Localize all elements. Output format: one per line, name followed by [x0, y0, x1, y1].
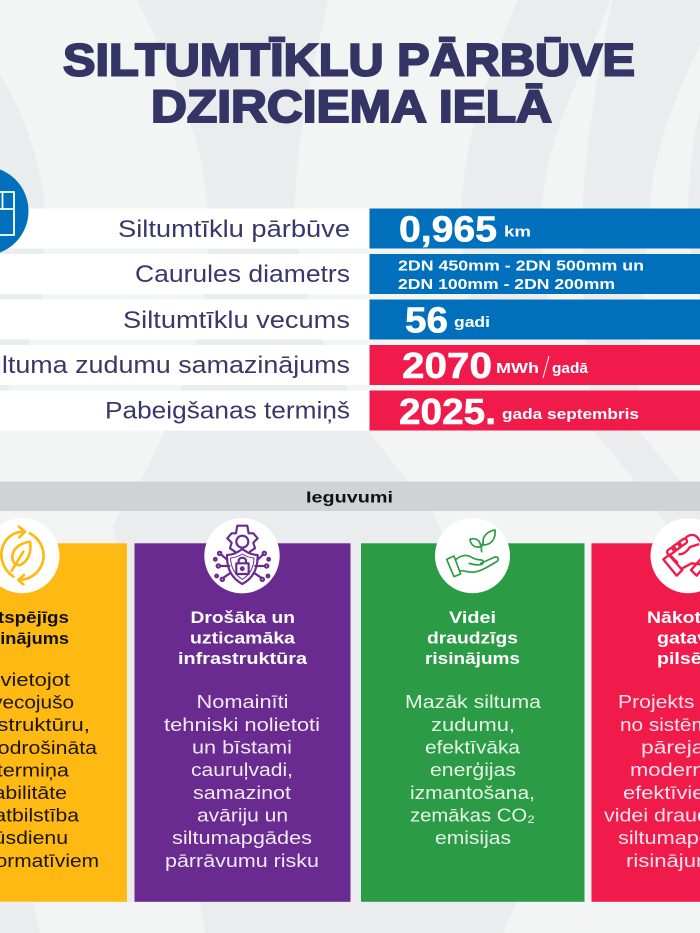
- card text: [0, 669, 99, 871]
- value: heat loss reduction: gadā: [552, 360, 589, 377]
- label: network age: Siltumtīklu vecums: [123, 307, 350, 334]
- card title: infrastruktūra: [178, 650, 308, 668]
- card text: tehniski nolietoti: [164, 714, 320, 735]
- card title: Drošāka un: [190, 609, 295, 627]
- card text: [164, 691, 320, 871]
- card text: zemākas CO₂: [410, 804, 535, 826]
- value: heat loss reduction: 2070: [402, 345, 492, 386]
- card title: risinājums: [425, 650, 520, 668]
- icon: recycling leaf: [0, 518, 60, 593]
- value: length: 0,965: [399, 208, 497, 250]
- value: age: [405, 300, 490, 340]
- card title: [0, 609, 69, 648]
- title: SILTUMTĪKLU PĀRBŪVE: [63, 34, 635, 86]
- value: heat loss reduction: [402, 345, 589, 386]
- card title: [425, 609, 520, 668]
- title: [63, 34, 635, 132]
- value: diameters: 2DN 100mm - 2DN 200mm: [398, 276, 615, 293]
- card text: enerģijas: [430, 759, 516, 780]
- card text: efektīvāka: [425, 736, 521, 758]
- panel: project facts: [0, 208, 700, 432]
- card title: uzticamāka: [190, 630, 296, 648]
- label: completion date: Pabeigšanas termiņš: [105, 398, 350, 424]
- card text: Nomainīti: [196, 691, 288, 712]
- card text: [405, 691, 542, 848]
- icon: network badge: [0, 166, 28, 256]
- card text: zudumu,: [431, 714, 515, 735]
- card title: [647, 609, 700, 668]
- card title: Videi: [449, 609, 496, 627]
- value: heat loss reduction: MWh: [496, 360, 539, 377]
- value: length: km: [504, 224, 531, 240]
- card text: cauruļvadi,: [191, 759, 293, 780]
- title: DZIRCIEMA IELĀ: [151, 81, 552, 132]
- panel: sustainable solution: [0, 518, 127, 902]
- panel: safer infrastructure: [134, 518, 350, 902]
- value: length: [399, 208, 531, 250]
- card text: emisijas: [435, 827, 511, 848]
- value: completion date: gada septembris: [502, 406, 639, 423]
- card title: [178, 609, 308, 668]
- icon: hand with sprout: [435, 518, 510, 593]
- panel: future-ready city: [592, 518, 700, 902]
- card text: avāriju un: [197, 804, 288, 826]
- card text: pārrāvumu risku: [165, 850, 319, 871]
- card text: un bīstami: [192, 736, 292, 758]
- card title: draudzīgs: [427, 630, 518, 648]
- card text: samazinot: [193, 782, 291, 803]
- icon: clasped hands: [650, 518, 700, 593]
- icon: shield with gear: [204, 518, 280, 593]
- card text: Mazāk siltuma: [405, 691, 542, 712]
- heading: benefits: Ieguvumi: [306, 490, 393, 506]
- card text: [604, 691, 700, 871]
- value: diameters: [398, 258, 644, 293]
- card text: siltumapgādes: [172, 827, 312, 848]
- panel: eco-friendly solution: [361, 518, 584, 902]
- value: age: 56: [405, 300, 448, 340]
- value: completion date: [399, 391, 639, 432]
- card text: izmantošana,: [410, 782, 535, 803]
- label: pipe diameter: Caurules diametrs: [135, 261, 350, 288]
- value: diameters: 2DN 450mm - 2DN 500mm un: [398, 258, 644, 274]
- label: network reconstruction: Siltumtīklu pārbūve: [118, 216, 350, 243]
- value: age: gadi: [454, 314, 490, 331]
- heading: benefits: [0, 482, 700, 511]
- value: completion date: 2025.: [399, 391, 496, 432]
